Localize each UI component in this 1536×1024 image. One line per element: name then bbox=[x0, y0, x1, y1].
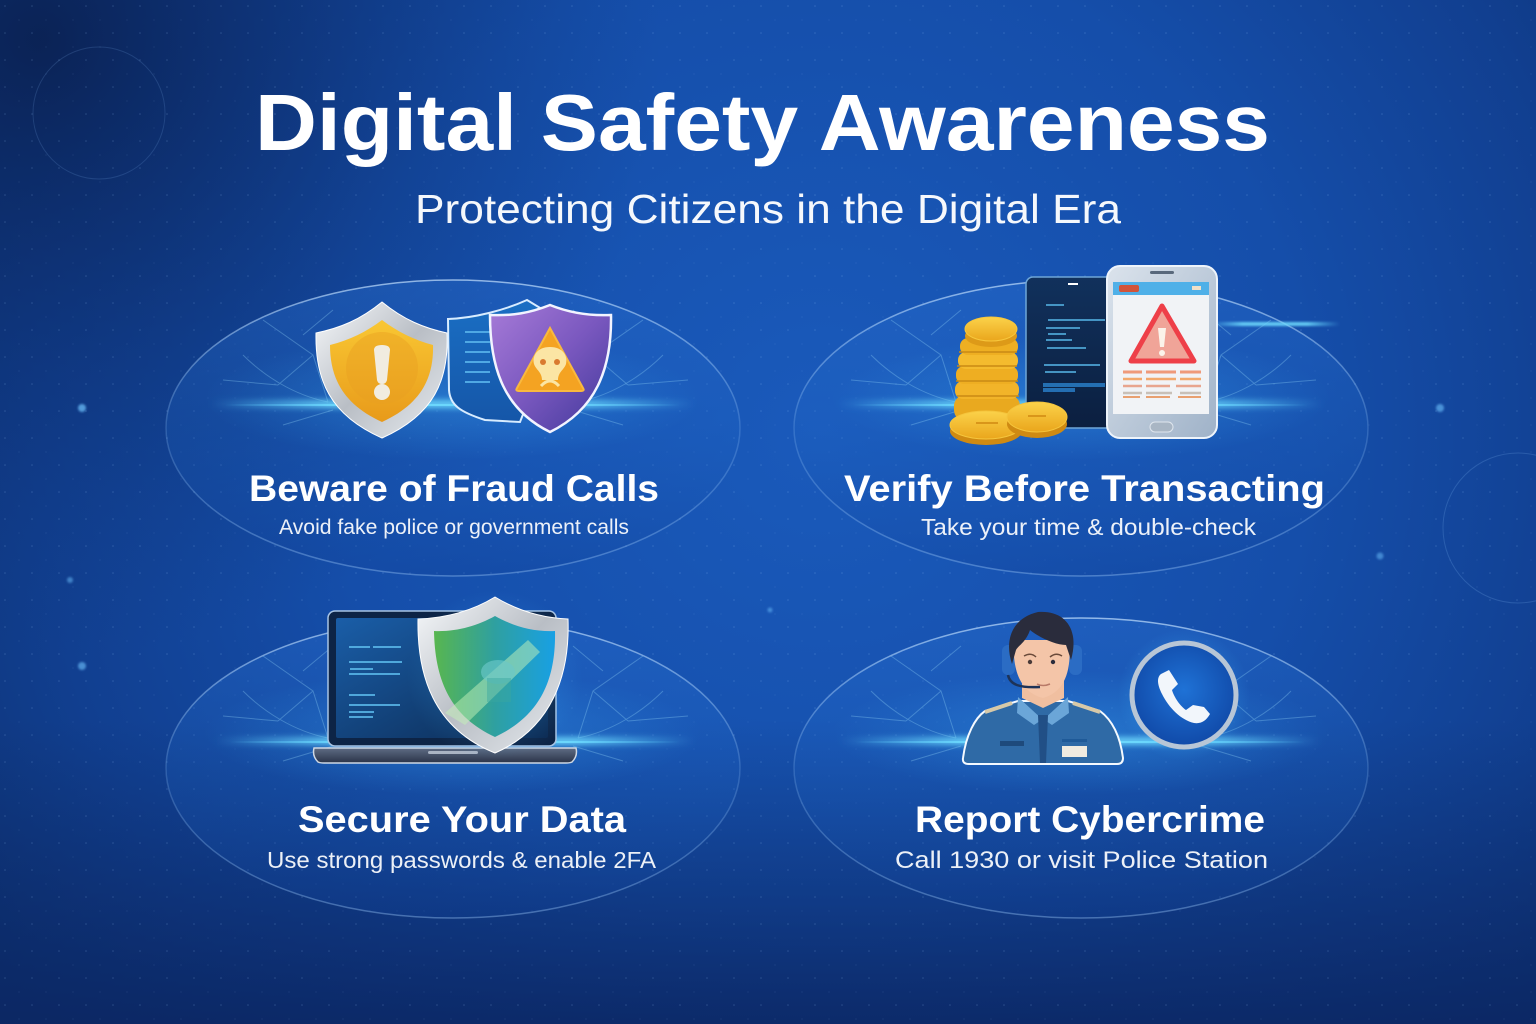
icon: green blue security shield bbox=[407, 590, 583, 760]
description: Call 1930 or visit Police Station bbox=[895, 847, 1268, 874]
icon: phone call button bbox=[1118, 629, 1250, 761]
icon: laptop bbox=[314, 611, 576, 763]
icon: coin stack bbox=[950, 317, 1067, 445]
description: Avoid fake police or government calls bbox=[279, 516, 629, 539]
icon: phone with alert bbox=[1107, 266, 1217, 438]
panel: secure your data bbox=[166, 590, 740, 918]
icon: tablet bbox=[1026, 277, 1121, 428]
description: Take your time & double-check bbox=[921, 514, 1257, 540]
subtitle: Protecting Citizens in the Digital Era bbox=[415, 186, 1121, 232]
panel: beware of fraud calls bbox=[166, 280, 740, 576]
heading: Beware of Fraud Calls bbox=[249, 468, 659, 509]
heading: Secure Your Data bbox=[298, 799, 626, 840]
panel: verify before transacting bbox=[794, 266, 1368, 576]
title: Digital Safety Awareness bbox=[255, 78, 1270, 167]
icon: document bbox=[448, 300, 560, 422]
heading: Report Cybercrime bbox=[915, 799, 1265, 840]
icon: purple danger shield bbox=[490, 305, 611, 432]
panel: report cybercrime bbox=[794, 612, 1368, 918]
heading: Verify Before Transacting bbox=[844, 468, 1325, 509]
icon: warning shield bbox=[316, 302, 447, 438]
description: Use strong passwords & enable 2FA bbox=[267, 847, 657, 873]
icon: police officer with headset bbox=[963, 612, 1123, 764]
